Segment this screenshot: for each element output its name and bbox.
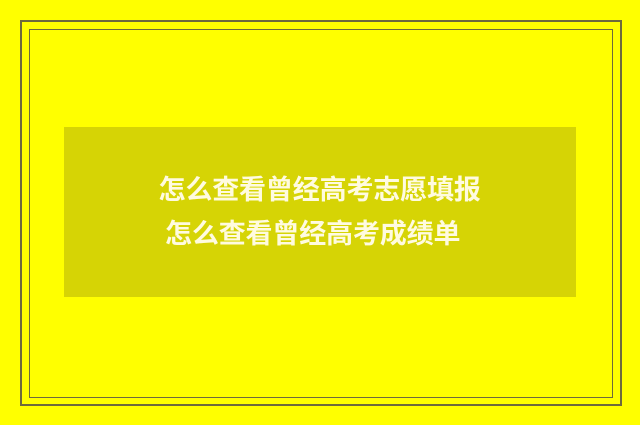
heading line 2: 怎么查看曾经高考成绩单 [165, 219, 460, 249]
heading line 1: 怎么查看曾经高考志愿填报 [158, 175, 481, 205]
inner border frame [29, 29, 613, 398]
title panel [64, 127, 576, 297]
